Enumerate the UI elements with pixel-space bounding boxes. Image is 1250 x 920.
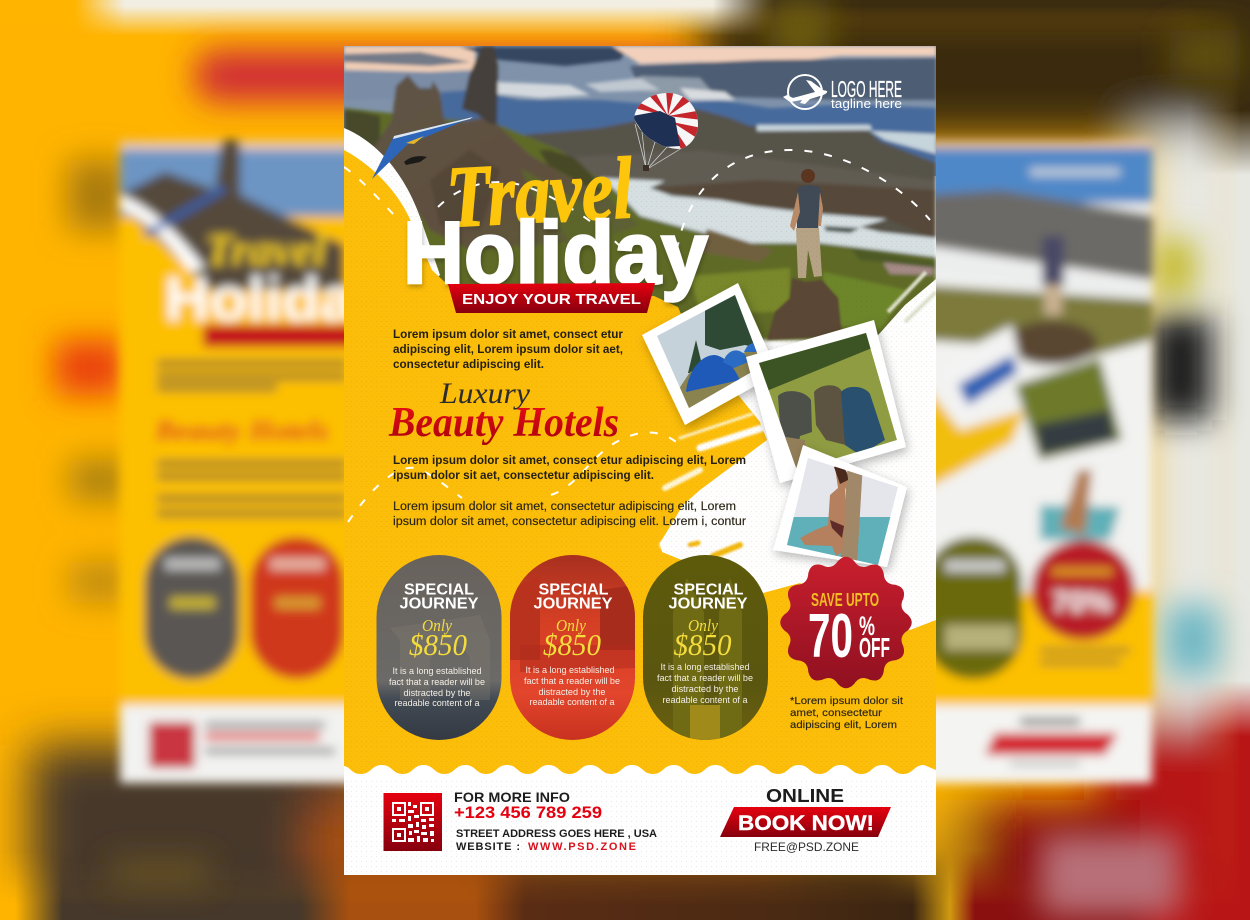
pill: special journey three: $850 bbox=[674, 627, 732, 662]
pill: special journey two: $850 bbox=[543, 627, 601, 662]
pill: special journey one: distracted by the bbox=[404, 688, 470, 698]
banner: enjoy your travel bbox=[448, 283, 655, 313]
left blurred flyer: Travel bbox=[205, 224, 326, 275]
right blurred flyer bbox=[925, 141, 1152, 783]
pill: special journey three: distracted by the bbox=[672, 684, 738, 694]
white swoosh and yellow panel bbox=[344, 128, 936, 775]
pill: special journey three: SPECIAL bbox=[674, 582, 744, 598]
contact details: WWW.PSD.ZONE bbox=[528, 841, 636, 853]
icon: hang glider bbox=[372, 117, 473, 179]
pill: special journey one bbox=[376, 555, 502, 740]
text block: footnote: amet, consectetur bbox=[790, 707, 883, 719]
white corner of photo bbox=[878, 279, 936, 343]
call to action: online book now: ONLINE bbox=[766, 786, 844, 806]
rock under the man bbox=[767, 278, 842, 340]
pill: special journey three: Only bbox=[688, 616, 718, 635]
contact details: FOR MORE INFO bbox=[454, 789, 570, 805]
pill: special journey one: $850 bbox=[409, 627, 467, 662]
contact details: WEBSITE : bbox=[456, 841, 520, 853]
left blurred flyer bbox=[120, 140, 389, 783]
pill: special journey two: fact that a reader will be bbox=[524, 676, 620, 686]
text block: footnote: adipiscing elit, Lorem bbox=[790, 719, 897, 731]
call to action: online book now: FREE@PSD.ZONE bbox=[754, 840, 859, 854]
pill: special journey three: fact that a reader will be bbox=[657, 673, 753, 683]
contact details bbox=[454, 792, 657, 850]
photo card: beach bbox=[773, 445, 907, 572]
pill: special journey two: It is a long established bbox=[526, 665, 614, 675]
pill: special journey two: distracted by the bbox=[538, 687, 606, 697]
heading: luxury beauty hotels: Luxury bbox=[439, 377, 531, 410]
text block: intro: Lorem ipsum dolor sit amet, consect etur bbox=[393, 329, 624, 341]
pill: special journey two: JOURNEY bbox=[534, 596, 613, 612]
icon: logo: tagline here bbox=[831, 96, 902, 111]
pill: special journey three: It is a long established bbox=[660, 662, 750, 672]
badge: save upto 70% off: OFF bbox=[859, 632, 890, 663]
icon: logo: LOGO HERE bbox=[831, 76, 902, 102]
pill: special journey one: SPECIAL bbox=[404, 582, 474, 598]
text block: paragraph three bbox=[393, 501, 746, 528]
text block: intro bbox=[393, 329, 624, 371]
text block: paragraph three: ipsum dolor sit amet, consectetur adipiscing elit. Lorem i, contur bbox=[393, 516, 746, 528]
text block: footnote bbox=[790, 695, 903, 731]
pill: special journey one: Only bbox=[422, 616, 452, 635]
heading: luxury beauty hotels bbox=[388, 384, 618, 445]
left blurred flyer: Holiday bbox=[165, 265, 389, 334]
title bbox=[403, 140, 708, 302]
call to action: online book now: BOOK NOW! bbox=[738, 812, 874, 835]
left blurred flyer: Beauty Hotels bbox=[154, 414, 329, 447]
brush strokes bbox=[664, 414, 762, 556]
pill: special journey three: readable content of a bbox=[662, 695, 748, 705]
text block: paragraph three: Lorem ipsum dolor sit amet, consectetur adipiscing elit, Lorem bbox=[393, 501, 736, 513]
icon: man standing bbox=[790, 169, 823, 278]
flyer bbox=[344, 46, 936, 875]
heading: luxury beauty hotels: Beauty Hotels bbox=[388, 400, 619, 446]
text block: intro: consectetur adipiscing elit. bbox=[393, 359, 544, 371]
text block: footnote: *Lorem ipsum dolor sit bbox=[790, 695, 903, 707]
contact details: +123 456 789 259 bbox=[454, 803, 602, 822]
icon: qr code bbox=[384, 793, 442, 851]
title: Travel bbox=[444, 140, 636, 247]
pill: special journey two: Only bbox=[556, 616, 586, 635]
badge: save upto 70% off: 70 bbox=[808, 602, 853, 671]
pill: special journey one: JOURNEY bbox=[400, 596, 479, 612]
icon: parachute bbox=[634, 93, 698, 171]
footer panel bbox=[344, 765, 936, 853]
text block: paragraph two bbox=[393, 455, 746, 482]
text block: intro: adipiscing elit, Lorem ipsum dolor sit aet, bbox=[393, 344, 623, 356]
text block: paragraph two: Lorem ipsum dolor sit amet, consect etur adipiscing elit, Lorem bbox=[393, 455, 746, 467]
title: Holiday bbox=[403, 203, 708, 302]
photo card: hikers bbox=[746, 320, 906, 483]
pill: special journey three: JOURNEY bbox=[668, 596, 748, 612]
pill: special journey two: readable content of a bbox=[530, 697, 614, 707]
pill: special journey one: fact that a reader will be bbox=[389, 677, 485, 687]
badge: save upto 70% off: SAVE UPTO bbox=[811, 590, 879, 610]
pill: special journey one: readable content of a bbox=[394, 698, 480, 708]
text block: paragraph two: ipsum dolor sit aet, consectetur adipiscing elit. bbox=[393, 470, 654, 482]
dashed flight paths bbox=[344, 150, 930, 522]
pill: special journey two bbox=[510, 555, 635, 740]
photo card: tents bbox=[642, 283, 778, 425]
paper texture bbox=[344, 161, 936, 774]
pill: special journey two: SPECIAL bbox=[538, 582, 608, 598]
call to action: online book now bbox=[720, 786, 891, 854]
pill: special journey three bbox=[643, 555, 768, 740]
contact details: STREET ADDRESS GOES HERE , USA bbox=[456, 828, 657, 840]
badge: save upto 70% off: % bbox=[859, 611, 875, 641]
right blurred flyer: 70% bbox=[1052, 586, 1112, 619]
pill: special journey one: It is a long established bbox=[392, 666, 482, 676]
badge: save upto 70% off bbox=[780, 557, 912, 688]
photo: mountain landscape bbox=[344, 46, 936, 340]
icon: logo bbox=[783, 75, 902, 111]
banner: enjoy your travel: ENJOY YOUR TRAVEL bbox=[462, 291, 641, 308]
